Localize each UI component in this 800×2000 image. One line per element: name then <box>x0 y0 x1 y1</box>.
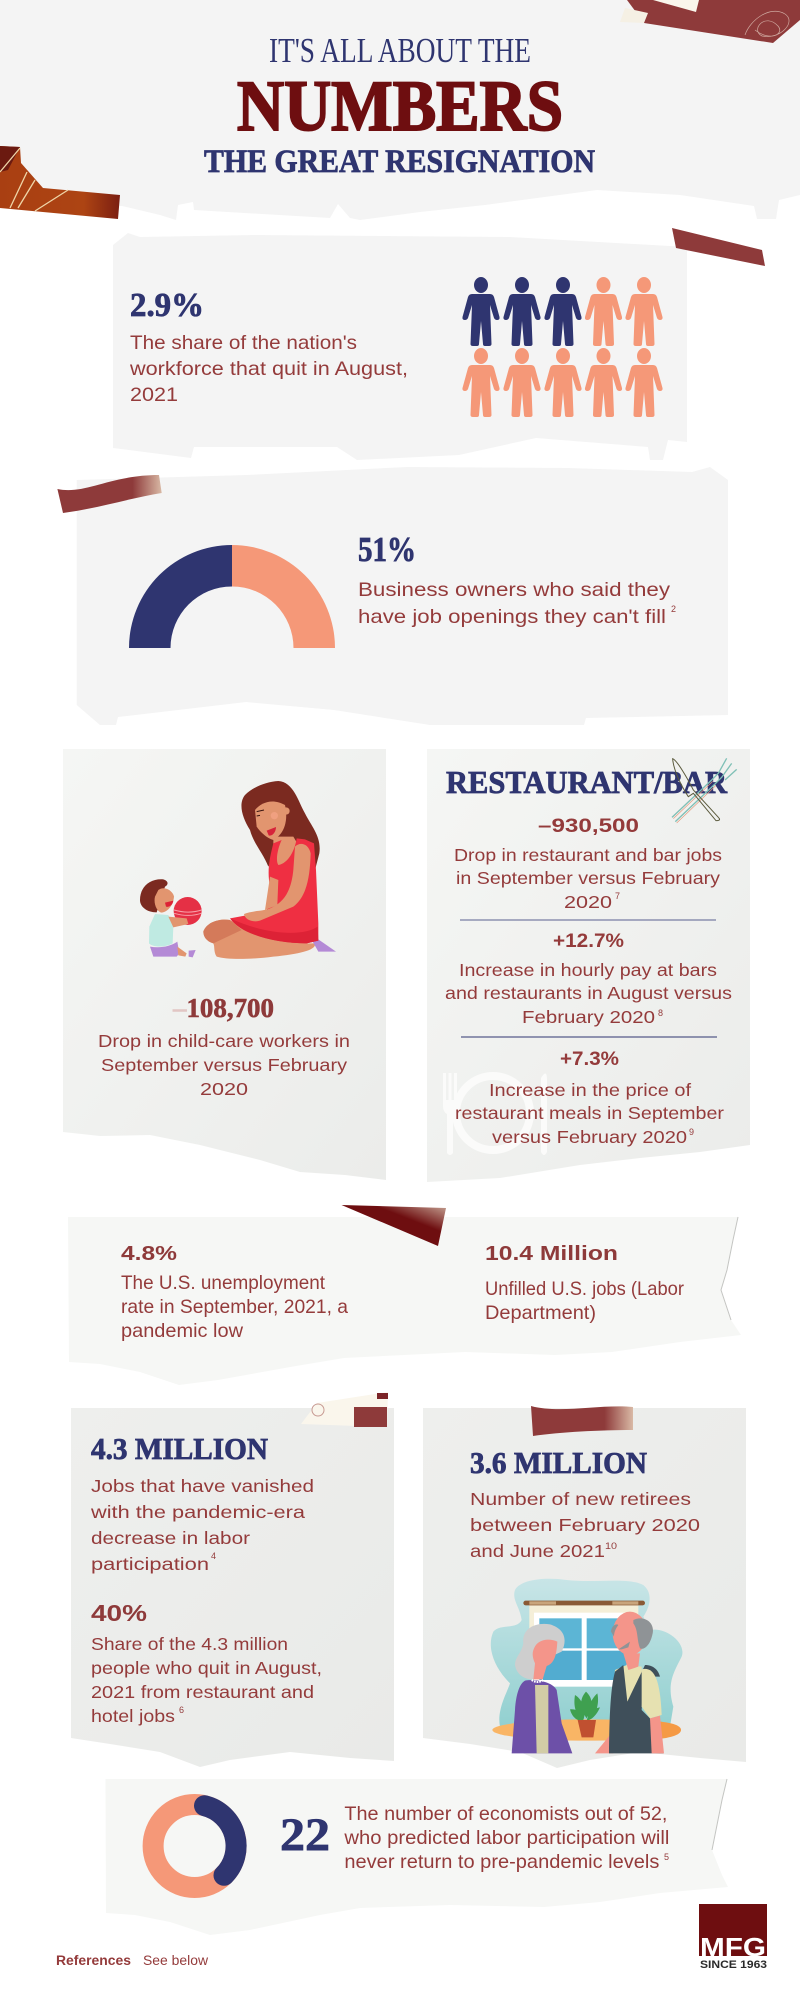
description: who predicted labor participation will <box>343 1827 669 1849</box>
description: 40 percent: hotel jobs <box>91 1706 175 1726</box>
description: unfilled jobs: Unfilled U.S. jobs (Labor <box>485 1278 684 1300</box>
description: Business owners who said they <box>358 579 670 601</box>
tape: left <box>0 146 120 219</box>
title line one: IT'S ALL ABOUT THE <box>269 31 531 70</box>
description: restaurant jobs: Drop in restaurant and bar jobs <box>454 845 722 865</box>
description: and June 2021 <box>470 1541 605 1561</box>
icon: fork and knife <box>672 758 737 823</box>
stat: meal prices: +7.3% <box>560 1049 619 1070</box>
description: September versus February <box>101 1055 347 1075</box>
panel background <box>423 1408 746 1768</box>
description: restaurant jobs: 2020 <box>564 892 612 912</box>
description: unemployment: The U.S. unemployment <box>121 1272 326 1294</box>
panel background <box>106 1779 728 1935</box>
description: 2 <box>671 604 676 614</box>
description: The number of economists out of 52, <box>344 1803 667 1825</box>
stat: hourly pay: +12.7% <box>553 931 624 952</box>
description: hourly pay: February 2020 <box>522 1007 655 1027</box>
heading: RESTAURANT/BAR <box>446 764 728 800</box>
references <box>56 1953 208 1968</box>
stat: –108,700 <box>172 993 274 1023</box>
description: 5 <box>664 1852 669 1862</box>
tape: top right <box>620 0 800 43</box>
description: 2021 <box>130 384 178 406</box>
description: 4 <box>211 1551 216 1561</box>
illustration: retired couple at window <box>491 1579 682 1753</box>
description: unfilled jobs <box>485 1278 684 1324</box>
description: 10 <box>605 1541 617 1551</box>
half donut chart <box>129 545 335 648</box>
description: decrease in labor <box>91 1528 250 1548</box>
description: unfilled jobs: Department) <box>485 1302 596 1324</box>
torn edge shading <box>721 1217 738 1320</box>
description: restaurant jobs: 7 <box>615 891 620 901</box>
panel background <box>63 749 386 1180</box>
panel: 51 percent <box>57 467 728 725</box>
tape <box>301 1392 388 1427</box>
tape <box>531 1406 633 1436</box>
description <box>90 1476 314 1574</box>
description: hourly pay <box>445 960 732 1027</box>
description: never return to pre-pandemic levels <box>344 1851 660 1873</box>
description: The share of the nation's <box>130 332 357 354</box>
title: numbers: NUMBERS <box>237 66 563 146</box>
subtitle: THE GREAT RESIGNATION <box>204 144 595 180</box>
panel: 3.6 million <box>423 1406 746 1768</box>
panel: child care <box>63 749 386 1180</box>
description: hourly pay: and restaurants in August versus <box>445 983 732 1003</box>
panel background <box>427 749 750 1182</box>
description: hourly pay: Increase in hourly pay at bars <box>459 960 717 980</box>
description: meal prices: 9 <box>689 1127 694 1137</box>
description: unemployment: rate in September, 2021, a <box>121 1296 348 1318</box>
description: meal prices: Increase in the price of <box>489 1080 691 1100</box>
tape: triangle <box>342 1205 446 1246</box>
description: restaurant jobs <box>454 845 722 912</box>
panel background <box>113 233 687 460</box>
description: restaurant jobs: in September versus February <box>456 868 720 888</box>
stat: 22 <box>280 1809 330 1861</box>
header background <box>0 0 800 220</box>
panel: unemployment and unfilled jobs <box>68 1205 741 1385</box>
tape <box>57 475 162 513</box>
panel: 4.3 million <box>71 1392 394 1767</box>
description: 40 percent: 6 <box>179 1705 184 1715</box>
panel background <box>71 1408 394 1767</box>
references: See below <box>143 1953 208 1968</box>
panel background <box>68 1217 741 1385</box>
description <box>129 332 408 406</box>
logo: MFG: SINCE 1963 <box>700 1959 767 1971</box>
description: meal prices: versus February 2020 <box>492 1127 687 1147</box>
description: Jobs that have vanished <box>91 1476 314 1496</box>
panel background <box>77 467 728 725</box>
stat: unfilled jobs: 10.4 Million <box>485 1243 618 1265</box>
logo: MFG: MFG <box>700 1932 766 1962</box>
tape <box>672 228 765 266</box>
pictogram: ten people <box>462 277 663 417</box>
description: have job openings they can't fill <box>358 606 666 628</box>
stat: 2.9% <box>130 287 204 324</box>
panel: 22 economists <box>106 1779 728 1935</box>
description: Number of new retirees <box>470 1489 691 1509</box>
stat: 51% <box>358 530 416 569</box>
description: meal prices: restaurant meals in September <box>455 1103 724 1123</box>
stat: unemployment: 4.8% <box>121 1243 177 1265</box>
description <box>470 1489 700 1561</box>
description <box>343 1803 669 1873</box>
torn edge shading <box>712 1779 727 1850</box>
description: 40 percent: people who quit in August, <box>91 1658 322 1678</box>
description: between February 2020 <box>470 1515 700 1535</box>
donut chart <box>153 1804 236 1888</box>
references: References <box>56 1953 131 1968</box>
description: participation <box>91 1554 209 1574</box>
stat: restaurant jobs: –930,500 <box>538 816 639 837</box>
header panel <box>0 0 800 220</box>
description: with the pandemic-era <box>90 1502 305 1522</box>
description: 40 percent: 2021 from restaurant and <box>91 1682 314 1702</box>
panel: 2.9 percent <box>113 228 765 460</box>
panel: restaurant and bar <box>427 749 750 1182</box>
description: unemployment: pandemic low <box>121 1320 244 1342</box>
icon: plate and cutlery watermark <box>443 1073 547 1155</box>
description <box>358 579 676 628</box>
stat: 40 percent: 40% <box>91 1600 147 1626</box>
stat: 3.6 MILLION <box>470 1445 647 1480</box>
stat: 4.3 MILLION <box>91 1431 268 1466</box>
description: unemployment <box>121 1272 348 1342</box>
description: workforce that quit in August, <box>129 358 408 380</box>
description: Drop in child-care workers in <box>98 1031 350 1051</box>
description: meal prices <box>455 1080 724 1147</box>
description: hourly pay: 8 <box>658 1008 663 1018</box>
description: 40 percent: Share of the 4.3 million <box>91 1634 288 1654</box>
description: 2020 <box>200 1079 248 1099</box>
illustration: mother and child with ball <box>140 781 336 959</box>
description: 40 percent <box>91 1634 322 1726</box>
description <box>98 1031 350 1099</box>
logo: MFG <box>699 1904 767 1971</box>
